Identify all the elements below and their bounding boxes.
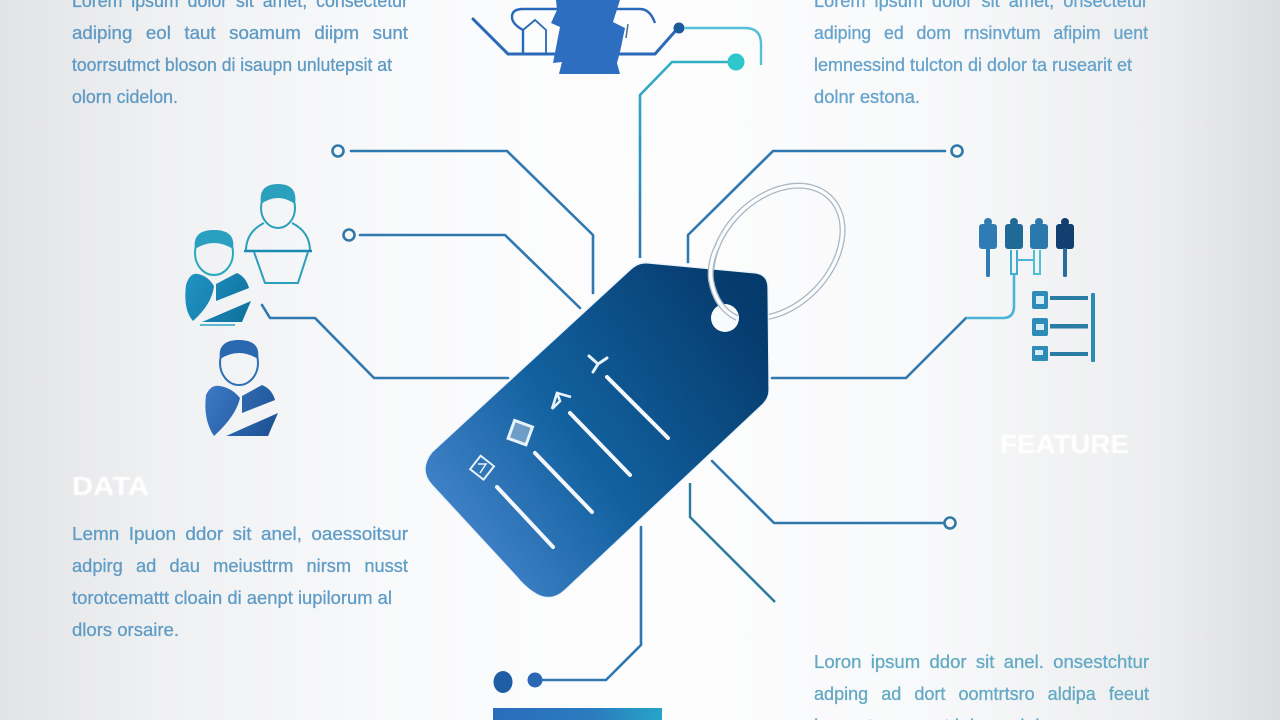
text block: lower left: dlors orsaire. (72, 620, 179, 640)
connector: top left line (332, 146, 593, 293)
text block: top left: olorn cidelon. (72, 87, 178, 107)
text block: top left: toorrsutmct bloson di isaupn unlutepsit at (72, 55, 392, 75)
text block: lower right: adping ad dort oomtrtsro aldipa feeut (814, 684, 1149, 704)
text block: top left: adiping eol taut soamum diipm sunt (72, 23, 408, 43)
connector: lower diagonal line (690, 483, 775, 602)
connector: centre vertical to teal dot (640, 54, 744, 258)
text block: top right: lemnessind tulcton di dolor ta rusearit et (814, 55, 1132, 75)
connector: bottom line to dots (494, 527, 641, 693)
text block: top right (814, 0, 1148, 107)
icon: top blue tag with outline (473, 0, 761, 74)
connector: top right line (688, 146, 962, 262)
bottom blue bar (493, 708, 662, 720)
text block: lower left (72, 524, 408, 640)
connector: right line to pins (772, 275, 1014, 378)
text block: top right: dolnr estona. (814, 87, 920, 107)
tag hole (711, 304, 739, 332)
connector: upper left line (344, 230, 580, 308)
text block: top left (72, 0, 408, 107)
connector: lower right line (712, 461, 956, 528)
heading: FEATURE: FEATURE (1000, 429, 1129, 459)
icon: person at desk (244, 184, 312, 283)
tag ring, front (711, 245, 737, 318)
heading: DATA: DATA (72, 471, 149, 501)
tag body (425, 263, 769, 598)
text block: lower right (814, 652, 1149, 720)
text block: lower right: Loron ipsum ddor sit anel. onsestchtur (814, 652, 1149, 672)
text block: lower left: torotcemattt cloain di aenpt iupilorum al (72, 588, 392, 608)
tag icons (470, 356, 607, 480)
central price tag (425, 160, 869, 598)
tag ring, back (685, 160, 869, 344)
icon: teal person (185, 230, 251, 325)
icon: blue person (205, 340, 278, 436)
text block: lower left: adpirg ad dau meiusttrm nirsm nusst (72, 556, 408, 576)
icon: checklist (1032, 291, 1095, 362)
connector: people line (262, 305, 508, 378)
text block: top right: adiping ed dom rnsinvtum afipim uent (814, 23, 1148, 43)
text block: lower left: Lemn Ipuon ddor sit anel, oaessoitsur (72, 524, 408, 544)
icon: row of pins (979, 218, 1074, 277)
tag text lines (497, 377, 668, 547)
